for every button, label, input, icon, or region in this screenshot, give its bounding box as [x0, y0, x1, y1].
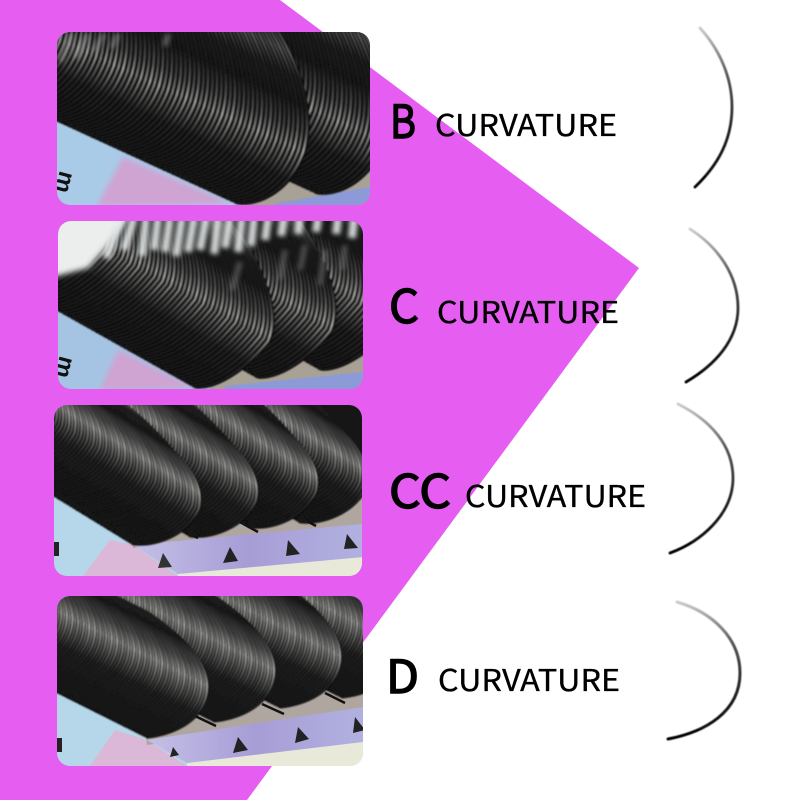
panel: C curvature lash photo [58, 221, 363, 389]
label: CC curvature [389, 456, 646, 522]
panel: D curvature lash photo [57, 596, 363, 766]
icon: C curve line [686, 229, 738, 382]
ruler strip with triangles [133, 524, 363, 574]
label: C curvature [389, 271, 619, 337]
label: B curvature [390, 86, 617, 152]
label: D curvature: CURVATURE [438, 656, 620, 700]
icon: CC curve line [670, 404, 733, 553]
panel: B curvature lash photo [57, 32, 370, 205]
ruler strip with triangles [147, 707, 365, 763]
label: B curvature: B [390, 86, 416, 152]
label: D curvature [386, 641, 620, 707]
icon: B curve line [695, 28, 732, 187]
label: D curvature: D [386, 641, 419, 707]
label: CC curvature: CURVATURE [465, 472, 646, 516]
icon: D curve line [668, 602, 740, 739]
label: C curvature: CURVATURE [437, 288, 619, 332]
background: magenta arrow shape [0, 0, 639, 800]
panel: CC curvature lash photo [54, 405, 362, 576]
label: CC curvature: CC [389, 456, 451, 522]
panel: B curvature lash photo: m [49, 168, 80, 196]
label: B curvature: CURVATURE [435, 101, 617, 145]
label: C curvature: C [389, 271, 419, 337]
panel: C curvature lash photo: m [49, 353, 80, 381]
